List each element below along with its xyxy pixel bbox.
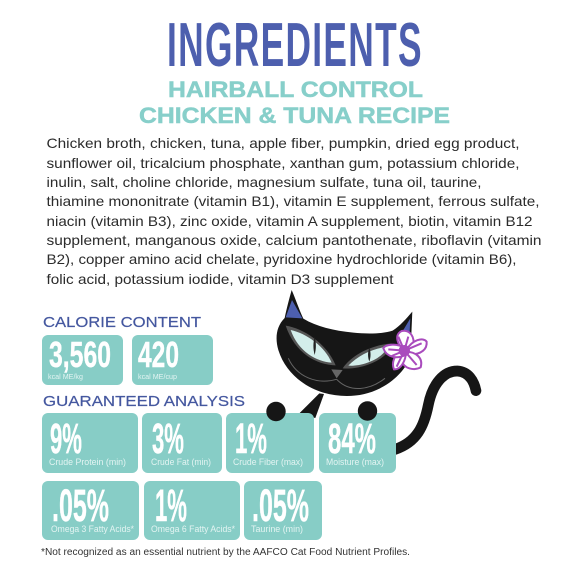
stat: taurine: Taurine (min) [251, 524, 303, 535]
cat eyes [286, 326, 392, 368]
cat inner ears [286, 300, 410, 332]
stat: crude protein: 9% [50, 415, 82, 463]
stat: crude fat [142, 413, 222, 473]
stat: omega 3: Omega 3 Fatty Acids* [51, 524, 134, 535]
cat nose and mouth [331, 369, 343, 378]
stat: omega 3: .05% [52, 480, 109, 531]
icon: cat paws on the boxes [266, 401, 377, 421]
ingredients text block [46, 135, 542, 287]
heading: guaranteed analysis: GUARANTEED ANALYSIS [43, 393, 245, 410]
stat: moisture: 84% [328, 415, 376, 463]
ingredients text block: sunflower oil, tricalcium phosphate, xanthan gum, potassium chloride, [46, 155, 520, 171]
stat: moisture: Moisture (max) [326, 457, 384, 468]
stat: omega 6: Omega 6 Fatty Acids* [151, 524, 235, 535]
icon: black cat head with flower [277, 290, 427, 396]
stat: 3,560 kcal ME/kg: 3,560 [49, 334, 111, 375]
subtitle [139, 77, 450, 128]
stat: crude protein: Crude Protein (min) [49, 457, 126, 468]
ingredients text block: inulin, salt, choline chloride, magnesium sulfate, tuna oil, taurine, [46, 174, 482, 190]
ingredients text block: thiamine mononitrate (vitamin B1), vitamin E supplement, ferrous sulfate, [46, 193, 540, 209]
title: INGREDIENTS [167, 9, 423, 80]
stat: 3,560 kcal ME/kg: kcal ME/kg [48, 372, 83, 381]
stat: omega 6: 1% [155, 480, 187, 531]
stat: crude fat: 3% [152, 415, 184, 463]
subtitle: CHICKEN & TUNA RECIPE [139, 103, 450, 128]
stat: 420 kcal ME/cup: kcal ME/cup [138, 372, 177, 381]
stat: 420 kcal ME/cup [132, 334, 213, 385]
stat: crude fiber: 1% [235, 415, 267, 463]
stat: crude fiber: Crude Fiber (max) [233, 457, 303, 468]
heading: calorie content: CALORIE CONTENT [43, 314, 201, 331]
cat head [277, 290, 412, 396]
stat: crude protein [42, 413, 138, 473]
stat: crude fiber [226, 413, 314, 473]
stat: omega 6 [144, 480, 240, 540]
stat: crude fat: Crude Fat (min) [151, 457, 211, 468]
ingredients text block: folic acid, potassium iodide, vitamin D3 supplement [46, 271, 394, 287]
stat: 3,560 kcal ME/kg [42, 334, 123, 385]
ingredients text block: B2), copper amino acid chelate, pyridoxine hydrochloride (vitamin B6), [46, 251, 516, 267]
cat pupils [313, 337, 371, 362]
ingredients text block: Chicken broth, chicken, tuna, apple fiber, pumpkin, dried egg product, [46, 135, 520, 151]
flower [383, 331, 427, 369]
ingredients text block: niacin (vitamin B3), zinc oxide, vitamin A supplement, biotin, vitamin B12 [46, 213, 533, 229]
stat: taurine [244, 480, 322, 540]
icon: cat tail and leg behind the boxes [299, 371, 476, 449]
stat: omega 3 [42, 480, 139, 540]
ingredients text block: supplement, manganous oxide, calcium pantothenate, riboflavin (vitamin [46, 232, 542, 248]
stat: 420 kcal ME/cup: 420 [138, 334, 179, 375]
stat: taurine: .05% [252, 480, 309, 531]
subtitle: HAIRBALL CONTROL [168, 77, 423, 102]
footnote: *Not recognized as an essential nutrient by the AAFCO Cat Food Nutrient Profiles. [41, 547, 410, 558]
stat: moisture [319, 413, 396, 473]
